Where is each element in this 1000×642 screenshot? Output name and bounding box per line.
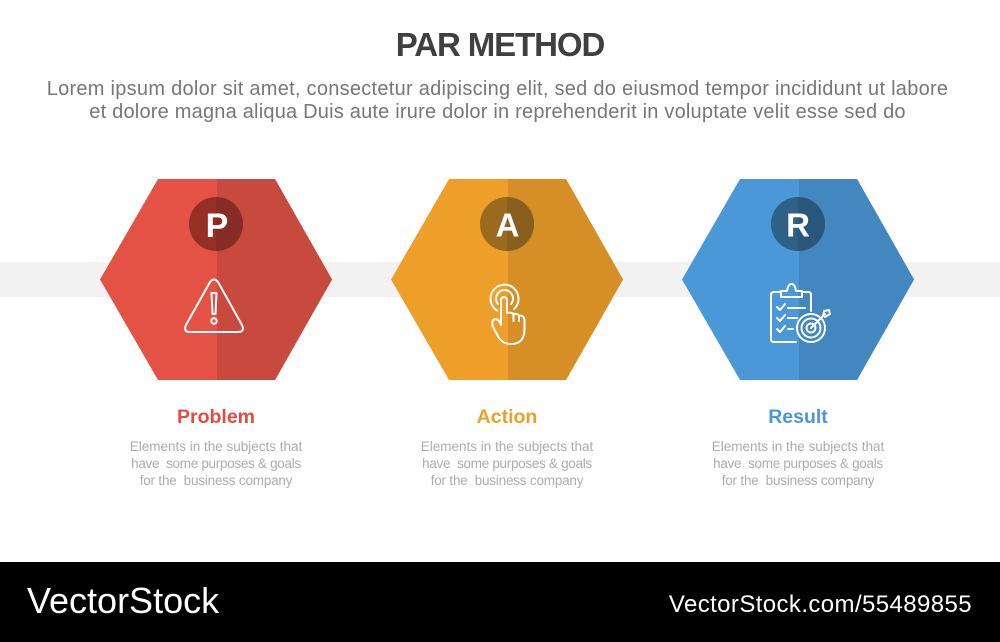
heading: Problem: Problem — [177, 406, 255, 428]
text: Action description — [421, 439, 594, 488]
text: Result description: for the business company — [722, 473, 874, 488]
text: Result description — [712, 439, 884, 488]
intro text: Lorem ipsum dolor sit amet, consectetur adipiscing elit, sed do eiusmod tempor incididunt ut labore — [47, 78, 948, 100]
hexagon: Problem — [100, 179, 332, 380]
text: Problem description: have some purposes & goals — [131, 456, 301, 471]
icon: pointing hand — [491, 285, 524, 344]
text: Action description: for the business company — [431, 473, 583, 488]
hexagon: Action — [391, 179, 623, 380]
footer logo: VectorStock — [27, 580, 219, 621]
footer url: VectorStock.com/55489855 — [669, 591, 972, 618]
hexagon: Problem: P — [206, 207, 228, 245]
title: PAR METHOD — [396, 26, 604, 63]
text: Action description: Elements in the subjects that — [421, 439, 593, 454]
text: Problem description: for the business company — [140, 473, 292, 488]
text: Action description: have some purposes & goals — [422, 456, 592, 471]
footer bar — [0, 562, 1000, 642]
hexagon: Action: A — [496, 206, 519, 244]
icon: warning triangle — [185, 280, 243, 332]
icon: clipboard and target — [771, 284, 830, 342]
hexagon: Result — [682, 179, 914, 380]
hexagon: Result: R — [786, 206, 810, 244]
text: Problem description — [130, 439, 302, 488]
heading: Action: Action — [477, 406, 537, 428]
intro text — [47, 78, 948, 122]
text: Result description: have some purposes & goals — [713, 456, 883, 471]
intro text: et dolore magna aliqua Duis aute irure dolor in reprehenderit in voluptate velit esse sed do — [89, 100, 906, 122]
heading: Result: Result — [768, 406, 828, 428]
text: Problem description: Elements in the subjects that — [130, 439, 302, 454]
text: Result description: Elements in the subjects that — [712, 439, 884, 454]
